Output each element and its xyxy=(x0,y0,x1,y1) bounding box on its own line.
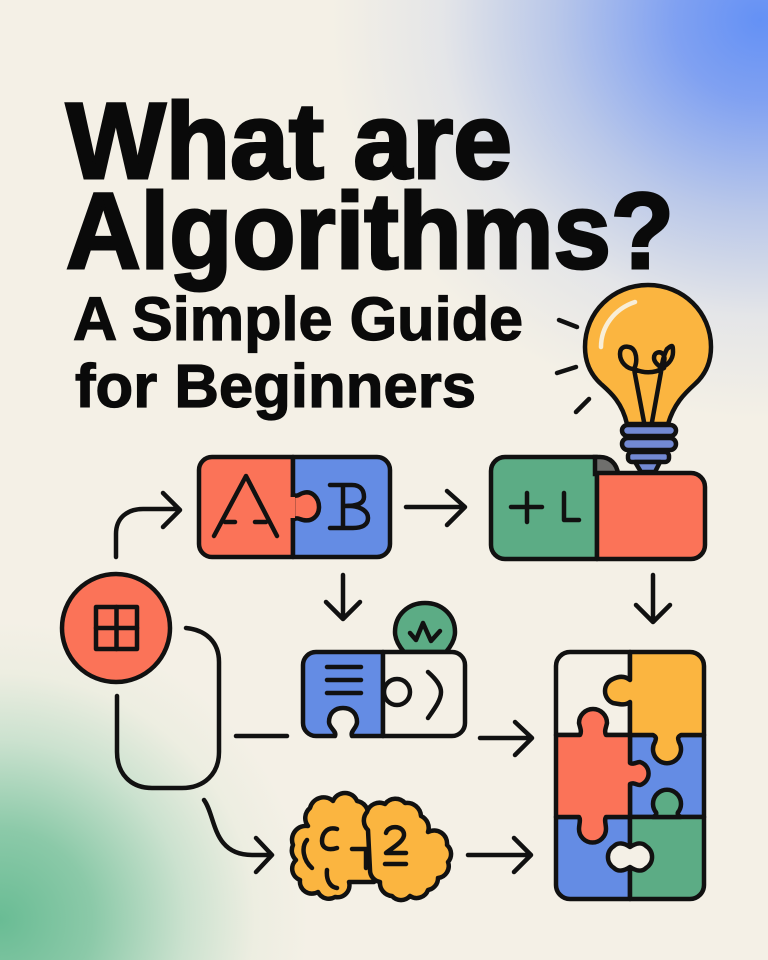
piece: red xyxy=(556,709,649,842)
knob: cream double oval xyxy=(608,843,652,871)
puzzle block: lines and bracket xyxy=(303,652,465,736)
icon: light bulb xyxy=(585,285,711,472)
title: Algorithms? xyxy=(66,170,674,291)
arrow: loop to brain xyxy=(204,800,272,872)
subtitle: for Beginners xyxy=(75,352,476,420)
title: What are xyxy=(66,80,512,201)
digit 2 xyxy=(385,827,406,864)
letter L xyxy=(564,493,579,520)
piece: blue left xyxy=(556,817,630,899)
piece: white xyxy=(556,652,630,735)
puzzle block: A and B xyxy=(199,457,390,557)
letter B xyxy=(330,485,368,528)
arrow: block down to puzzle xyxy=(636,575,670,622)
block: plus and L xyxy=(491,457,705,559)
arrow: lines block to puzzle xyxy=(480,722,532,755)
icon: light rays xyxy=(557,320,589,412)
puzzle grid xyxy=(556,652,704,899)
connector dash xyxy=(236,734,287,738)
piece: yellow xyxy=(605,652,704,763)
arrow: brain to puzzle xyxy=(468,838,531,872)
arrow: A and B down xyxy=(326,575,360,619)
text lines xyxy=(327,667,361,693)
knob: green up xyxy=(653,790,681,817)
start circle xyxy=(62,574,170,682)
brain details xyxy=(304,828,366,888)
subtitle: A Simple Guide xyxy=(73,285,523,353)
arrow: start to A and B xyxy=(116,493,180,557)
connector loop xyxy=(117,628,219,788)
icon: brain with C and 2 xyxy=(292,793,451,900)
title xyxy=(66,80,674,291)
icon: grid xyxy=(96,607,137,649)
icon: green bulb badge xyxy=(395,603,455,652)
arrow: A and B to plus block xyxy=(406,491,465,525)
left brain lobe xyxy=(292,793,374,899)
piece: blue right xyxy=(630,735,704,817)
piece: green xyxy=(630,817,704,899)
plus sign xyxy=(511,493,542,522)
subtitle xyxy=(73,285,523,420)
bracket xyxy=(428,672,441,718)
right brain lobe xyxy=(364,799,451,900)
letter A xyxy=(214,476,277,536)
